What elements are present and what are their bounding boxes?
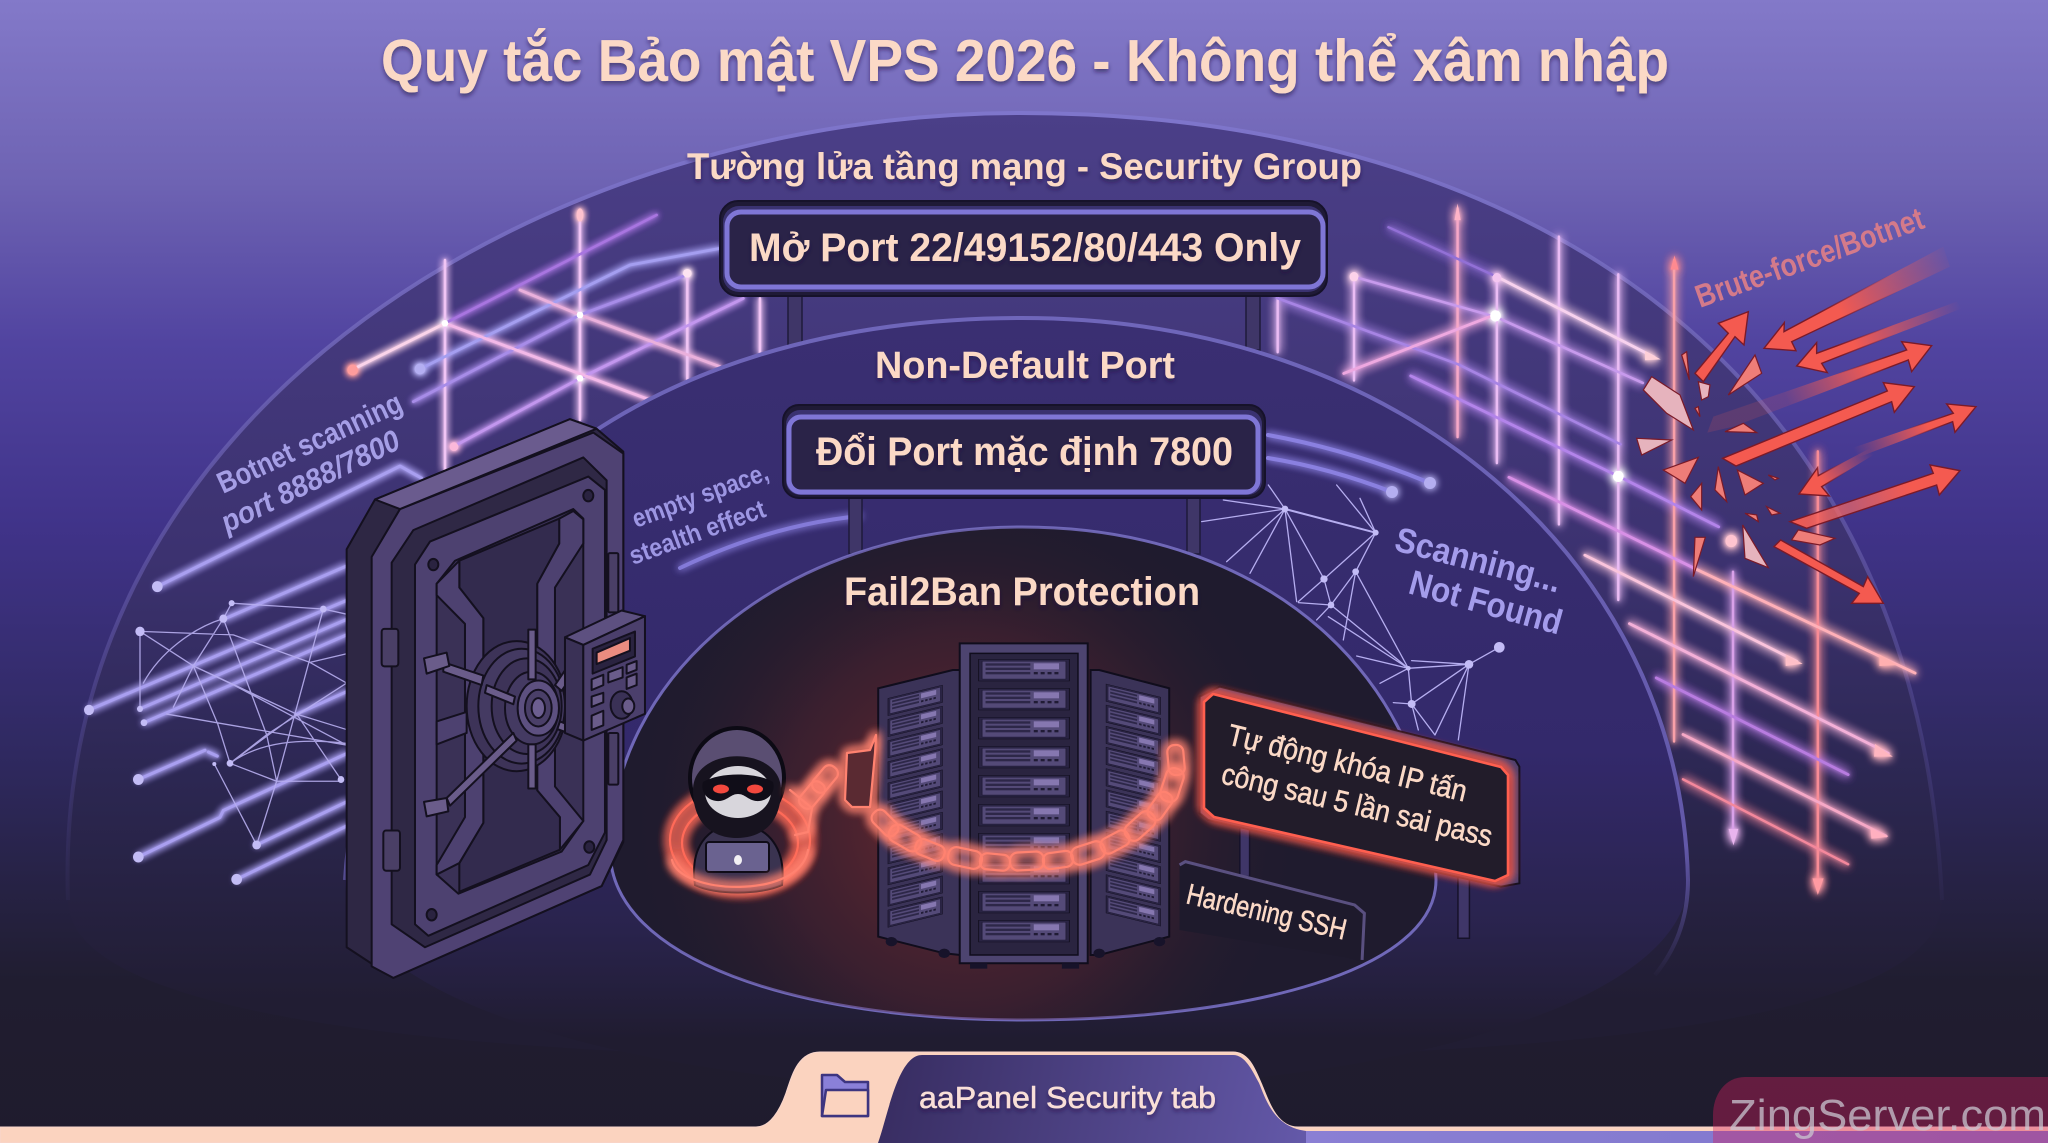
sign posts: security group [788, 290, 1260, 350]
heading: fail2ban protection: Fail2Ban Protection [844, 570, 1200, 614]
hinges [382, 629, 400, 871]
handcuff and chain [672, 735, 1186, 887]
bottom right strip [1300, 1131, 2048, 1143]
door body [347, 419, 623, 978]
sign: open ports: Mở Port 22/49152/80/443 Only [749, 226, 1302, 270]
network mesh: scanning not found [1202, 485, 1505, 740]
label: empty space stealth effect: stealth effect [625, 493, 770, 571]
vault door [347, 419, 645, 978]
rack right [1091, 670, 1169, 958]
active tab [878, 1055, 1306, 1143]
watermark: ZingServer.com [1729, 1091, 2046, 1140]
sign: open ports [720, 201, 1327, 296]
title: Quy tắc Bảo mật VPS 2026 - Không thể xâm nhập [381, 28, 1669, 94]
label: brute-force botnet: Brute-force/Botnet [1690, 200, 1929, 315]
handcuff ring back [670, 788, 810, 892]
heading: network firewall layer: Tường lửa tầng mạng - Security Group [687, 146, 1362, 187]
wheel dial [467, 641, 567, 771]
wheel hub [518, 681, 559, 736]
red warning text: Tự động khóa IP tấn [1224, 719, 1470, 808]
firewall grid right [1277, 204, 1915, 895]
rack left [878, 670, 960, 958]
watermark [1713, 1077, 2048, 1143]
thin mesh lines [140, 603, 347, 845]
firewall grid left [347, 208, 760, 470]
outer dome: network firewall layer [68, 113, 1942, 1060]
hardening ssh board [1180, 862, 1364, 962]
bolts right [608, 553, 618, 785]
sign posts red sign [1240, 820, 1469, 938]
label: empty space stealth effect [625, 457, 772, 571]
stealth scan arcs [680, 435, 1436, 568]
keypad [565, 610, 645, 741]
sign: change default port [783, 405, 1265, 498]
label: scanning not found: Scanning... [1391, 520, 1565, 601]
attack arrows and shattered shards [1637, 247, 1976, 603]
sign: change default port: Đổi Port mặc định 7800 [816, 430, 1233, 474]
heading: non-default port: Non-Default Port [875, 345, 1175, 387]
mesh nodes [84, 581, 344, 885]
icon: folder [822, 1075, 868, 1116]
hacker figure [690, 728, 784, 892]
tab label: aaPanel Security tab [919, 1080, 1216, 1115]
door centre panel [459, 519, 560, 892]
inner dome: fail2ban layer [610, 527, 1436, 1020]
red warning sign board [1200, 687, 1519, 887]
server racks, warning sign frames [878, 643, 1519, 969]
rivets [427, 490, 594, 920]
red warning text [1218, 719, 1496, 854]
red warning sign neon frame [1204, 694, 1508, 881]
wheel spokes [424, 630, 582, 816]
glass shards [1637, 352, 1835, 577]
thick scan lines [89, 466, 422, 879]
label: hardening ssh: Hardening SSH [1183, 879, 1349, 946]
label: botnet scanning: Botnet scanning [212, 387, 407, 500]
label: empty space stealth effect: empty space, [628, 457, 772, 534]
label: scanning not found: Not Found [1405, 563, 1567, 642]
bottom folder tab base [0, 1052, 2048, 1143]
rack centre [960, 643, 1088, 969]
botnet scan lines and network mesh [84, 466, 422, 885]
label: scanning not found [1391, 520, 1567, 642]
attack arrows [1695, 247, 1976, 603]
sign posts: default port [849, 494, 1200, 554]
label: botnet scanning: port 8888/7800 [215, 424, 406, 540]
red warning text: công sau 5 lần sai pass [1218, 758, 1496, 854]
middle dome: non-default port layer [345, 318, 1688, 1090]
